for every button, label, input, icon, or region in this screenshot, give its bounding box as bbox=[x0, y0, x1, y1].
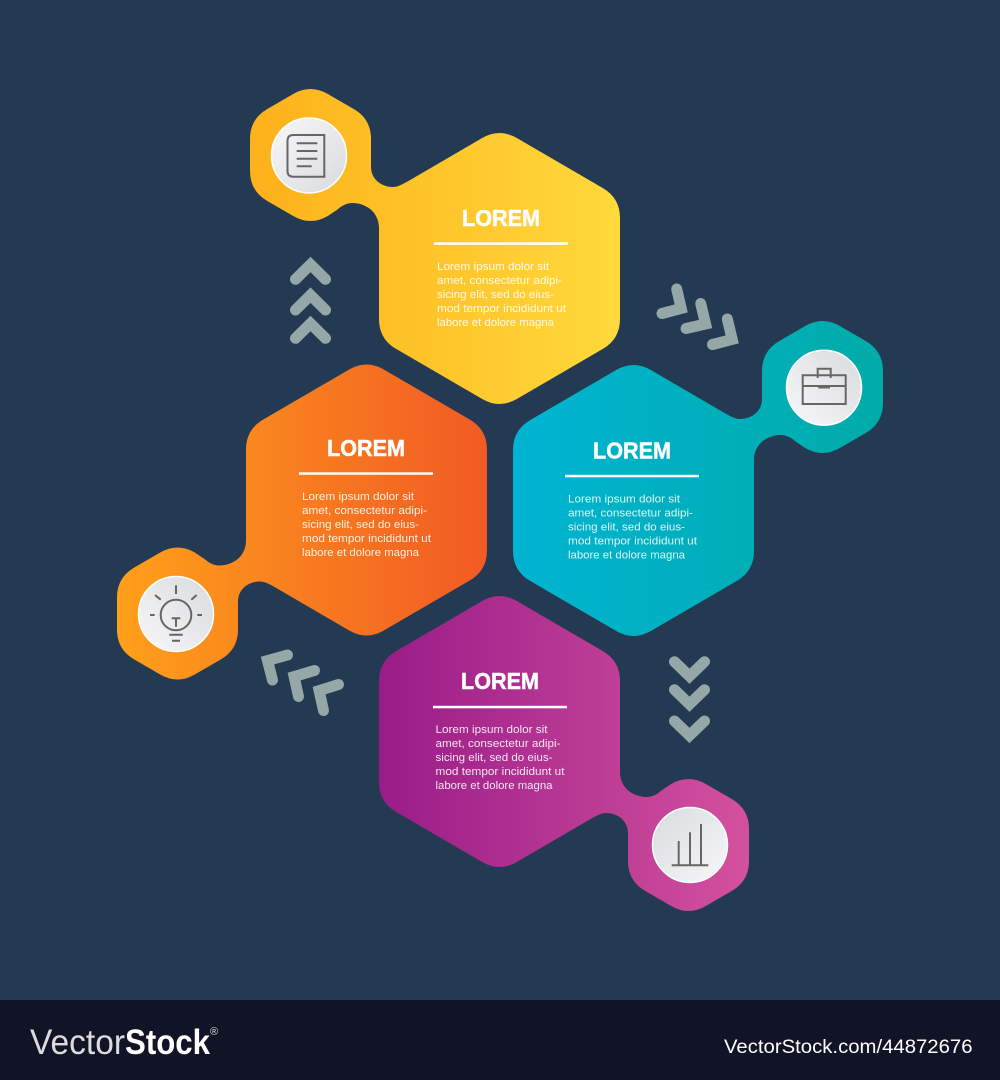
body text: blue: sicing elit, sed do eius- bbox=[568, 522, 685, 534]
icon: light bulb bbox=[138, 576, 214, 652]
icon: bar chart bbox=[652, 808, 728, 882]
body text: magenta bbox=[436, 724, 564, 792]
body text: magenta: Lorem ipsum dolor sit bbox=[436, 724, 548, 736]
body text: orange: Lorem ipsum dolor sit bbox=[302, 491, 414, 503]
icon: briefcase bbox=[786, 350, 862, 425]
body text: orange: mod tempor incididunt ut bbox=[302, 533, 431, 545]
hexagon shape: blue bbox=[513, 321, 883, 636]
footer bar bbox=[0, 1000, 1000, 1080]
icon: document bbox=[272, 118, 346, 193]
hexagon shape: orange bbox=[117, 364, 487, 680]
body text: orange: sicing elit, sed do eius- bbox=[302, 519, 419, 531]
footer reference: VectorStock.com/44872676 bbox=[724, 1037, 972, 1058]
panel: yellow step bbox=[250, 89, 620, 404]
rule: magenta bbox=[433, 706, 567, 708]
panel: orange step bbox=[117, 364, 487, 680]
footer logo: VectorStock bbox=[30, 1023, 220, 1062]
body text: orange: amet, consectetur adipi- bbox=[302, 505, 427, 517]
body text: orange: labore et dolore magna bbox=[302, 547, 420, 559]
heading: orange: LOREM bbox=[327, 435, 405, 461]
body text: magenta: mod tempor incididunt ut bbox=[436, 766, 564, 778]
heading: magenta: LOREM bbox=[461, 668, 539, 694]
body text: blue: labore et dolore magna bbox=[568, 550, 686, 562]
arrow: chevrons right bbox=[662, 289, 732, 344]
body text: yellow: amet, consectetur adipi- bbox=[437, 275, 562, 287]
panel: magenta step bbox=[379, 596, 749, 911]
rule: orange bbox=[299, 472, 433, 475]
hexagon shape: yellow bbox=[250, 89, 620, 404]
body text: magenta: sicing elit, sed do eius- bbox=[436, 752, 553, 764]
body text: blue: Lorem ipsum dolor sit bbox=[568, 494, 680, 506]
body text: yellow: labore et dolore magna bbox=[437, 317, 555, 329]
body text: blue bbox=[568, 494, 697, 562]
body text: yellow: Lorem ipsum dolor sit bbox=[437, 261, 549, 273]
rule: blue bbox=[565, 475, 699, 477]
body text: orange bbox=[302, 491, 431, 559]
body text: yellow bbox=[437, 261, 566, 329]
body text: yellow: mod tempor incididunt ut bbox=[437, 303, 566, 315]
rule: yellow bbox=[434, 242, 568, 245]
body text: magenta: labore et dolore magna bbox=[436, 780, 553, 792]
heading: yellow: LOREM bbox=[462, 205, 540, 231]
footer logo: ® bbox=[210, 1026, 218, 1038]
hexagon shape: magenta bbox=[379, 596, 749, 911]
heading: blue: LOREM bbox=[593, 438, 671, 464]
arrow: chevrons up bbox=[296, 264, 326, 338]
panel: blue step bbox=[513, 321, 883, 636]
body text: blue: mod tempor incididunt ut bbox=[568, 536, 697, 548]
body text: blue: amet, consectetur adipi- bbox=[568, 508, 693, 520]
arrow: chevrons down bbox=[674, 662, 704, 736]
arrow: chevrons left bbox=[268, 655, 338, 710]
body text: magenta: amet, consectetur adipi- bbox=[436, 738, 561, 750]
body text: yellow: sicing elit, sed do eius- bbox=[437, 289, 554, 301]
